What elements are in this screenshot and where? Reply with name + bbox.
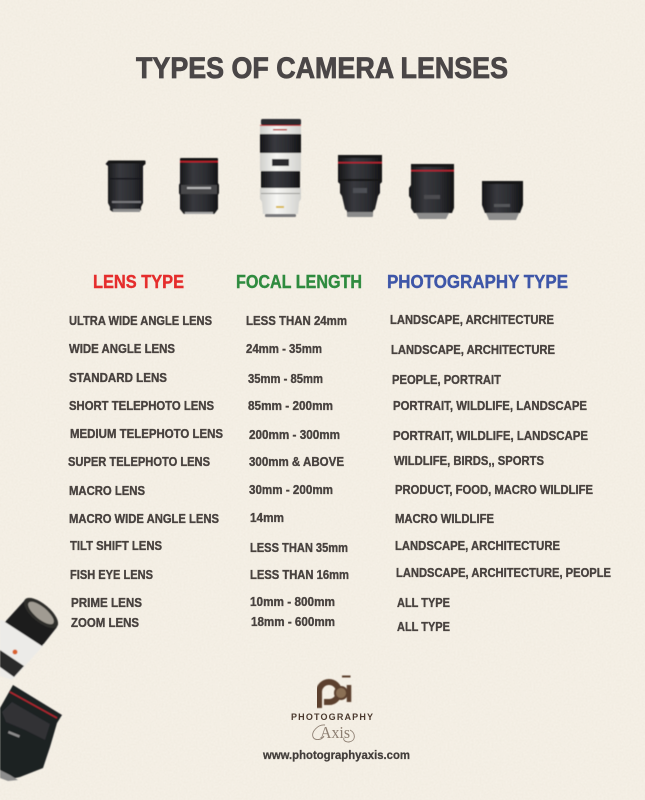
focal length column: 35mm - 85mm [248,372,323,386]
lens type column: TILT SHIFT LENS [70,539,162,553]
photography type column: PEOPLE, PORTRAIT [392,373,501,387]
logo wordmark: PHOTOGRAPHY [291,712,373,722]
focal length column: 85mm - 200mm [248,399,333,413]
lens type column: STANDARD LENS [69,371,167,385]
focal length column: 30mm - 200mm [249,483,333,497]
lens type column: MEDIUM TELEPHOTO LENS [70,427,223,441]
focal length column [246,314,349,629]
photography type column: LANDSCAPE, ARCHITECTURE, PEOPLE [396,566,611,580]
icon: lens 4 [338,155,382,217]
lens type column: MACRO WIDE ANGLE LENS [69,512,219,526]
lens type column: MACRO LENS [69,484,145,498]
photography type column: LANDSCAPE, ARCHITECTURE [390,313,554,327]
photography type column: PORTRAIT, WILDLIFE, LANDSCAPE [393,429,588,443]
photography type column: ALL TYPE [397,596,450,610]
icon: pa monogram [319,676,350,708]
focal length column: LESS THAN 35mm [250,541,348,555]
lens row [106,119,523,220]
icon: corner white lens [0,593,63,680]
focal length column: 10mm - 800mm [250,595,335,609]
photography type column: ALL TYPE [397,620,450,634]
lens type column [68,314,223,630]
photography type column: LANDSCAPE, ARCHITECTURE [391,343,555,357]
icon: lens 2 [179,158,219,214]
icon: lens 5 [409,164,454,219]
photography type column: LANDSCAPE, ARCHITECTURE [395,539,560,553]
lens type column: SUPER TELEPHOTO LENS [68,455,210,469]
photography type column: WILDLIFE, BIRDS,, SPORTS [394,454,544,468]
focal length column: LESS THAN 24mm [246,314,347,328]
logo script: Axis [320,723,350,742]
column heading: photography type: PHOTOGRAPHY TYPE [387,271,568,292]
lens type column: ZOOM LENS [71,616,139,630]
lens type column: PRIME LENS [71,596,142,610]
logo: Photography Axis [291,676,373,742]
focal length column: 18mm - 600mm [251,615,335,629]
icon: lens 1 [106,160,146,212]
focal length column: LESS THAN 16mm [250,568,349,582]
focal length column: 14mm [250,511,284,525]
photography type column [390,313,611,634]
lens type column: ULTRA WIDE ANGLE LENS [69,314,212,328]
website url: www.photographyaxis.com [262,748,410,762]
focal length column: 24mm - 35mm [246,342,322,356]
photography type column: MACRO WILDLIFE [395,512,494,526]
photography type column: PRODUCT, FOOD, MACRO WILDLIFE [395,483,593,497]
icon: lens 3 white telephoto [260,119,301,217]
icon: lens 6 [482,181,523,220]
title: TYPES OF CAMERA LENSES [136,52,508,85]
lens type column: WIDE ANGLE LENS [69,342,175,356]
focal length column: 300mm & ABOVE [249,455,344,469]
photography type column: PORTRAIT, WILDLIFE, LANDSCAPE [393,399,587,413]
column heading: lens type: LENS TYPE [93,271,184,292]
icon: corner black lens [0,685,62,781]
lens type column: FISH EYE LENS [70,568,153,582]
lens type column: SHORT TELEPHOTO LENS [69,399,214,413]
focal length column: 200mm - 300mm [249,428,340,442]
column heading: focal length: FOCAL LENGTH [236,271,362,292]
